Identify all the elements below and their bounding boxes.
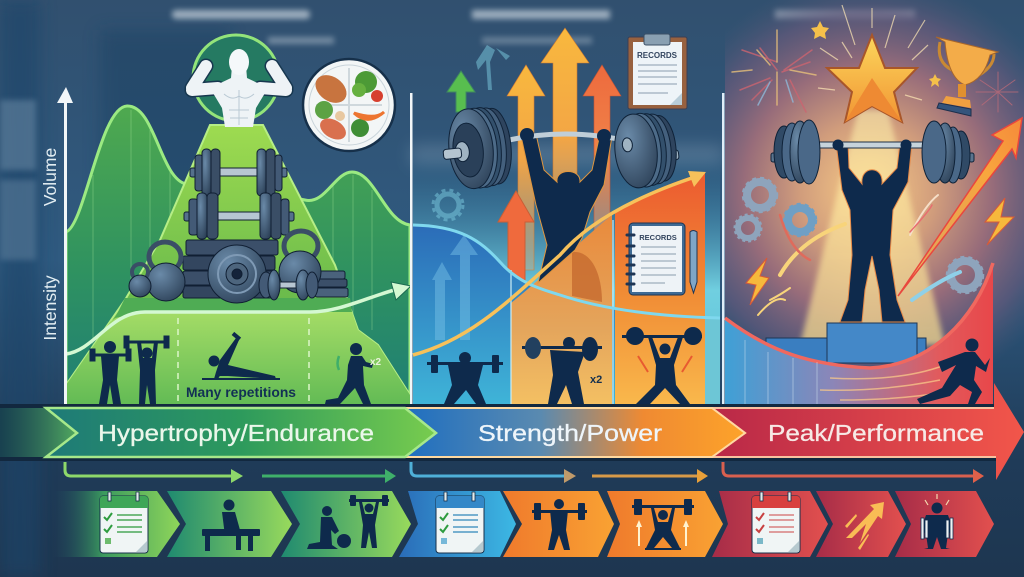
arrows rising — [447, 28, 621, 280]
athlete: sprinter — [917, 338, 990, 404]
green volume curve area — [66, 106, 410, 404]
small dumbbell — [259, 270, 318, 300]
divider — [722, 93, 724, 405]
teal gap — [705, 318, 720, 405]
barbell — [771, 120, 974, 184]
axis arrow — [57, 87, 73, 406]
icon: star — [827, 35, 917, 122]
icon: seated figure — [202, 500, 260, 551]
icon: calendar — [752, 492, 800, 553]
barbell bar — [500, 134, 632, 142]
arrow: orange left — [507, 65, 545, 270]
arrow: yellow center — [541, 28, 589, 270]
green pyramid — [66, 125, 410, 404]
intensity arrow — [413, 171, 706, 355]
radial glow — [725, 0, 1024, 405]
orange column 2 — [615, 172, 705, 405]
icon: records notebook — [627, 223, 697, 295]
label: many repetitions: Many repetitions — [186, 385, 296, 400]
lifter silhouette — [521, 134, 612, 283]
chevron 4 with calendar — [399, 491, 516, 557]
weight plate — [208, 245, 266, 303]
axes and dividers — [57, 87, 724, 406]
left fade — [0, 408, 80, 457]
icon: records notebook: RECORDS — [639, 233, 677, 242]
athlete: back squat x2 — [522, 337, 602, 404]
arrow: green 1 — [65, 462, 243, 483]
icon: records clipboard — [628, 34, 687, 109]
arrow: red — [723, 462, 984, 483]
icon: overhead press — [349, 495, 389, 548]
title: hypertrophy: Hypertrophy/Endurance — [98, 420, 374, 446]
rays around star — [818, 5, 928, 100]
icon: up arrows — [636, 520, 689, 546]
fireworks — [732, 30, 1018, 112]
dumbbell upper — [190, 149, 287, 196]
shelf — [115, 298, 352, 318]
icon: nutrition plate — [303, 59, 395, 151]
orange column 1 — [511, 215, 612, 405]
title: peak: Peak/Performance — [768, 420, 984, 446]
hands — [520, 128, 611, 143]
swooshes — [758, 195, 960, 315]
lightning bolts — [746, 198, 1014, 305]
athlete: plank with dumbbell — [202, 332, 280, 380]
chevron 2 with seated figure — [167, 491, 292, 557]
chevron 7 with calendar — [712, 491, 828, 557]
kettlebells — [129, 231, 321, 301]
panel: strength phase — [413, 28, 720, 405]
arrow: green — [447, 71, 475, 112]
right plates — [611, 110, 682, 190]
faint blue arrows — [432, 235, 478, 340]
dumbbell lower — [184, 193, 294, 239]
label: x2: x2 — [590, 374, 602, 386]
athlete: lunge runner — [325, 343, 373, 404]
arrow: red — [583, 65, 621, 250]
chevron: hypertrophy — [46, 408, 436, 457]
gears — [734, 178, 983, 293]
panel: peak phase — [725, 0, 1024, 405]
icon: calendar — [436, 492, 484, 553]
dim background icons — [433, 45, 510, 220]
small stars — [811, 21, 941, 87]
label: volume: Volume — [40, 148, 60, 206]
red curve and fill — [725, 263, 993, 405]
dark band — [0, 404, 1000, 461]
label: x2: x2 — [370, 357, 382, 368]
arrow: orange — [592, 469, 708, 483]
icon: squat press — [632, 499, 694, 550]
phase banner — [0, 383, 1024, 480]
icon: calendar — [100, 492, 148, 553]
podium — [766, 323, 926, 363]
intensity arrow — [66, 282, 411, 354]
athletes: squat — [427, 352, 503, 404]
vertical chart bands — [93, 110, 372, 360]
peak chevron outline — [712, 408, 996, 457]
chevron 3 with kneeling and press — [281, 491, 411, 557]
arrow: green 2 — [262, 469, 396, 483]
chevron: strength — [405, 408, 745, 457]
lower section — [66, 312, 410, 404]
volume curve — [413, 225, 720, 318]
blue falling area — [413, 225, 720, 405]
grid lines and speed streaks — [745, 340, 817, 405]
title: strength: Strength/Power — [478, 420, 662, 446]
icon: trophy — [936, 37, 998, 116]
icon: lifter — [532, 499, 587, 550]
chevron 6 with squat press — [607, 491, 723, 557]
left plates — [439, 105, 515, 191]
light beams — [800, 110, 945, 345]
teal backdrop — [413, 150, 720, 405]
icon: kneeling figure — [307, 506, 351, 549]
icon: heavy deadlift — [921, 494, 953, 549]
icon: energy burst — [845, 502, 884, 550]
icon: records clipboard: RECORDS — [637, 51, 678, 60]
arrow head and peak body — [712, 383, 1024, 480]
chevron 8 with sprint burst — [816, 491, 906, 557]
icon: muscular figure in circle — [192, 35, 286, 127]
label: intensity: Intensity — [40, 275, 60, 341]
arrow: red lower — [498, 191, 534, 280]
icon: barbell and lifter — [439, 105, 682, 283]
chevron 1 with calendar — [52, 491, 180, 557]
arrow: blue — [411, 462, 576, 483]
lifter silhouette — [836, 143, 912, 322]
chevron 5 with deadlift figure — [503, 491, 614, 557]
sub-phase chevrons — [52, 491, 994, 557]
leg shadow — [572, 252, 602, 302]
icon: pen — [690, 230, 697, 293]
sub-phase arrows — [65, 462, 984, 483]
athlete: snatch — [622, 327, 702, 404]
athletes: barbell lifters — [91, 337, 168, 404]
divider — [410, 93, 412, 405]
chevron 9 with heavy lifter — [895, 491, 994, 557]
arrow: rising performance — [898, 118, 1022, 296]
panel: hypertrophy phase — [66, 35, 411, 404]
icon: weights stack — [129, 149, 348, 303]
section separators — [178, 318, 309, 404]
